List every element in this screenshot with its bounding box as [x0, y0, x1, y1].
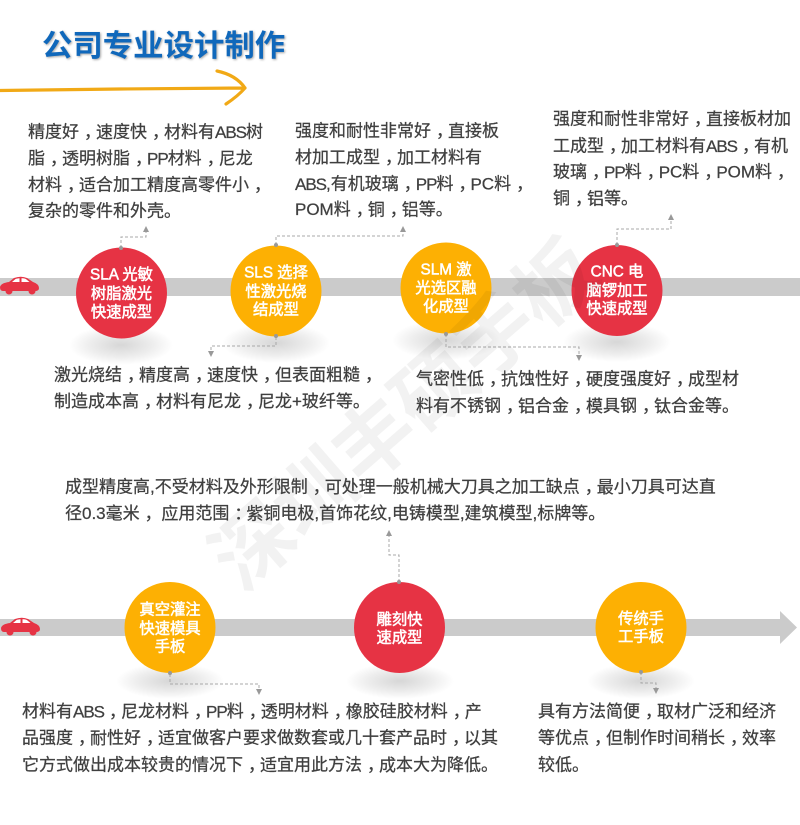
- circle: CNC: 脑锣加工: [586, 282, 648, 300]
- text block: SLS description: 激光烧结 ，精度高 ，速度快 ，但表面粗糙 ，: [54, 366, 382, 384]
- circle: SLM: 光选区融: [415, 280, 477, 297]
- circle: engraving: 雕刻快: [377, 612, 422, 628]
- text block: vacuum description: 材料有ABS ，尼龙材料 ，PP料 ，透明材料 ，橡胶硅胶材料 ，产: [22, 702, 482, 721]
- text block: engraving description: 径0.3毫米 ， 应用范围 ：紫铜电极,首饰花纹,电铸模型,建筑模型,标牌等。: [65, 504, 605, 523]
- text block: CNC description: [553, 110, 794, 208]
- circle: SLS: [230, 246, 322, 336]
- text block: handmade description: 较低。: [538, 756, 589, 774]
- circle: handmade: 传统手: [618, 610, 664, 628]
- circle: SLA: 树脂激光: [91, 286, 152, 302]
- text block: SLS-top description: 强度和耐性非常好 ，直接板: [295, 122, 499, 140]
- circle: SLS: 性激光烧: [245, 284, 307, 300]
- circle: CNC: CNC 电: [591, 264, 643, 280]
- circle: SLM: [400, 242, 492, 334]
- text block: SLA description: 脂 ，透明树脂 ，PP材料 ，尼龙: [28, 149, 253, 168]
- text block: SLS-top description: 材加工成型 ，加工材料有: [295, 148, 482, 167]
- connector: handmade down: [639, 670, 659, 694]
- connector: SLS down: [208, 334, 278, 357]
- circle: SLS: SLS 选择: [244, 264, 308, 282]
- text block: vacuum description: 它方式做出成本较贵的情况下 ，适宜用此方法 ，成本大为降低。: [22, 756, 498, 774]
- circle: SLA: 快速成型: [91, 304, 152, 321]
- circle: engraving: 速成型: [377, 630, 422, 646]
- connector: engraving up: [386, 530, 401, 584]
- text block: CNC description: 铜 ，铝等。: [553, 189, 638, 208]
- text block: CNC description: 工成型 ，加工材料有ABS ，有机: [553, 136, 788, 156]
- circle: SLA: SLA 光敏: [90, 266, 153, 284]
- circle: handmade: 工手板: [618, 628, 664, 646]
- text block: SLA description: 复杂的零件和外壳。: [28, 202, 181, 220]
- text block: vacuum description: 品强度 ，耐性好 ，适宜做客户要求做数套或几十套产品时 ，以其: [22, 728, 498, 748]
- circle: vacuum casting: 真空灌注: [139, 600, 201, 618]
- text block: handmade description: 具有方法简便 ，取材广泛和经济: [538, 702, 776, 721]
- text block: engraving description: 成型精度高,不受材料及外形限制 ，可处理一般机械大刀具之加工缺点 ，最小刀具可达直: [65, 478, 716, 496]
- circle: SLS: 结成型: [253, 302, 299, 318]
- text block: SLS-top description: ABS,有机玻璃 ，PP料 ，PC料 ，: [295, 174, 533, 194]
- text block: CNC description: 强度和耐性非常好 ，直接板材加: [553, 110, 791, 128]
- connector: vacuum down: [168, 671, 262, 695]
- circle: CNC: 快速成型: [586, 300, 648, 318]
- text block: SLM description: 料有不锈钢 ，铝合金 ，模具钢 ，钛合金等。: [416, 396, 739, 416]
- circle: vacuum casting: 手板: [155, 638, 185, 656]
- text block: SLS-top description: [295, 122, 533, 219]
- circle: engraving: [354, 582, 445, 673]
- text block: SLA description: [28, 122, 271, 220]
- text block: engraving description: [65, 478, 716, 523]
- text block: SLS description: [54, 366, 382, 411]
- text block: SLM description: 气密性低 ，抗蚀性好 ，硬度强度好 ，成型材: [416, 370, 739, 388]
- title underline arrow: [0, 71, 245, 104]
- circle: vacuum casting: 快速模具: [139, 620, 201, 638]
- text block: SLA description: 材料 ，适合加工精度高零件小 ，: [28, 176, 271, 194]
- icon: red car 1: [0, 277, 39, 294]
- timeline arrow 2: [0, 611, 797, 644]
- circle: handmade: [596, 582, 686, 673]
- circle: CNC: [572, 245, 662, 336]
- connector: CNC up: [615, 214, 674, 247]
- text block: vacuum description: [22, 702, 498, 774]
- text block: handmade description: 等优点 ，但制作时间稍长 ，效率: [538, 728, 776, 748]
- text block: handmade description: [538, 702, 776, 774]
- title: 公司专业设计制作: [42, 29, 285, 63]
- text block: SLS description: 制造成本高 ，材料有尼龙 ，尼龙+玻纤等。: [54, 392, 370, 411]
- text block: SLS-top description: POM料 ，铜 ，铝等。: [295, 200, 453, 219]
- circle: SLM: SLM 激: [420, 262, 472, 278]
- watermark: 深圳丰硕手板: [195, 224, 615, 606]
- text block: SLA description: 精度好 ，速度快 ，材料有ABS树: [28, 122, 263, 142]
- text block: CNC description: 玻璃 ，PP料 ，PC料 ，POM料 ，: [553, 162, 794, 182]
- timeline bar 1: [0, 278, 800, 296]
- circle: SLA: [76, 248, 167, 338]
- circle shadows: [69, 320, 695, 699]
- circle: vacuum casting: [124, 582, 216, 673]
- connector: SLA up: [119, 226, 149, 250]
- connector: SLM down: [444, 332, 582, 361]
- connector: SLS up: [274, 226, 406, 247]
- icon: red car 2: [1, 618, 40, 636]
- text block: SLM description: [416, 370, 739, 416]
- circle: SLM: 化成型: [423, 298, 469, 316]
